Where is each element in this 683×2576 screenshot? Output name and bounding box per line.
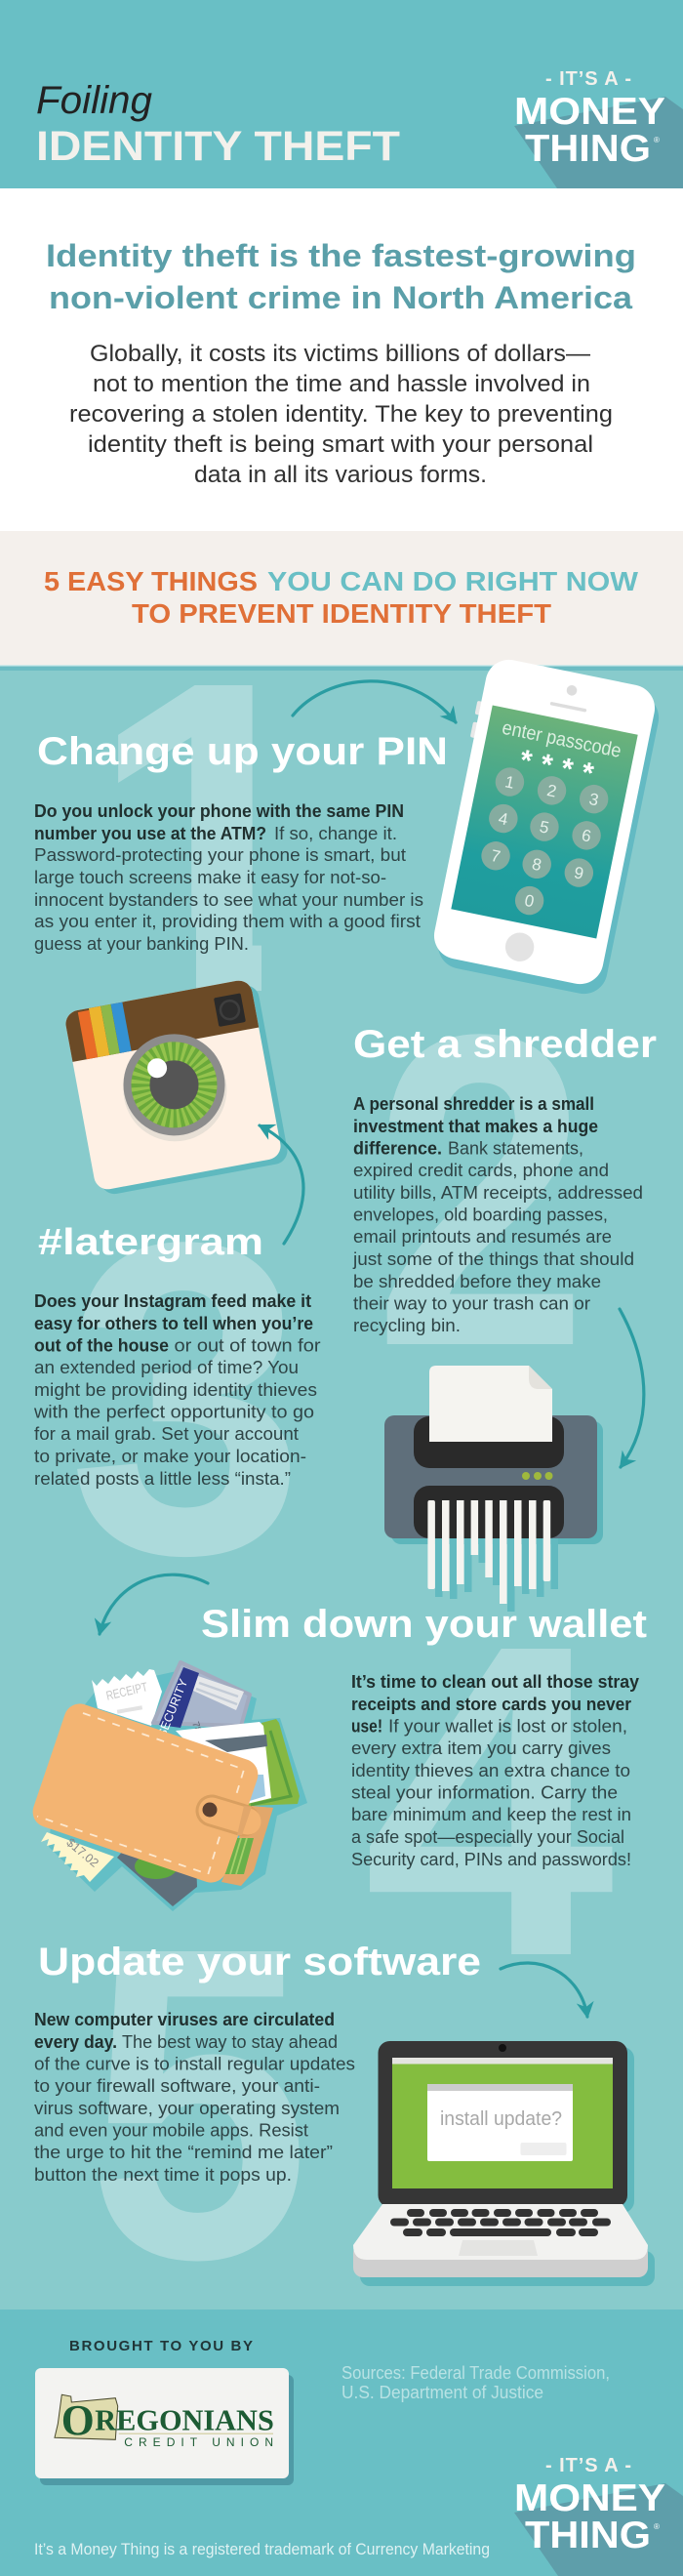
title: Foiling: Foiling [36,79,152,122]
text: step 2: A personal shredder is a small [353,1094,594,1114]
text: step 5: button the next time it pops up. [34,2165,292,2185]
text: step 1: innocent bystanders to see what your number is [34,890,423,910]
numeral 3: 3 [67,1151,305,1647]
icon: shredder [384,1366,603,1612]
sponsor card: O [61,2396,95,2444]
arrow: up to camera [260,1125,303,1244]
icon: phone: 5 [538,817,550,838]
text: step 4: use! [351,1716,382,1736]
text: step 2: difference. [353,1138,442,1158]
text: step 5: New computer viruses are circulated [34,2010,335,2029]
numeral 2: 2 [374,943,588,1439]
green bills [247,1719,300,1806]
logo: It's a Money Thing (footer): ® [654,2522,660,2531]
text: step 5: The best way to stay ahead [122,2032,338,2052]
update dialog: install update? [440,2108,562,2130]
text: step 4: If your wallet is lost or stolen, [388,1716,627,1736]
text: step 5: every day. [34,2032,117,2052]
sponsor card [35,2368,294,2485]
numeral 4: 4 [363,1553,618,2049]
text: step 4: receipts and store cards you never [351,1695,631,1714]
icon: phone: **** [517,744,596,791]
logo: It's a Money Thing (header): MONEY [514,91,665,133]
panel: 5 easy things banner: 5 EASY THINGS [44,566,258,596]
icon: phone: 2 [545,781,558,801]
text: step 3: or out of town for [174,1335,320,1355]
panel: intro [0,188,683,531]
heading: Get a shredder: Get a shredder [353,1023,657,1066]
sources: Sources: Federal Trade Commission, [342,2363,610,2383]
numeral 5: 5 [88,1856,310,2351]
text: step 2: utility bills, ATM receipts, addressed [353,1183,643,1203]
text: step 2: expired credit cards, phone and [353,1161,609,1180]
text: step 1: Do you unlock your phone with the same PIN [34,801,404,821]
text: step 3: an extended period of time? You [34,1358,299,1377]
text: step 4: every extra item you carry gives [351,1738,611,1758]
icon: laptop [353,2041,655,2286]
text: step 3: might be providing identity thieves [34,1380,317,1400]
text: step 3: for a mail grab. Set your account [34,1424,299,1444]
logo: It's a Money Thing (header): THING [525,128,651,170]
text: step 4: bare minimum and keep the rest in [351,1805,631,1824]
arrow: down to shredder [620,1309,644,1467]
icon: phone: 4 [497,809,509,829]
intro text: not to mention the time and hassle involved in [93,371,590,397]
intro text: recovering a stolen identity. The key to preventing [69,401,613,428]
text: step 3: easy for others to tell when you’re [34,1314,313,1333]
text: step 2: investment that makes a huge [353,1117,598,1136]
text: step 5: the urge to hit the “remind me later” [34,2143,333,2162]
intro heading: Identity theft is the fastest-growing [46,238,636,273]
logo: It's a Money Thing (footer): MONEY [514,2477,665,2519]
icon: wallet: $17.02 [63,1835,101,1870]
text: step 3: related posts a little less “insta.” [34,1469,291,1489]
text: step 5: virus software, your operating system [34,2099,340,2118]
text: step 5: to your firewall software, your anti- [34,2076,320,2096]
brought to you by: BROUGHT TO YOU BY [69,2338,253,2354]
intro heading [46,238,636,315]
receipt [92,1669,162,1726]
text: step 4: Security card, PINs and passwords! [351,1850,631,1869]
text: step 1 [34,801,423,954]
text: step 2: their way to your trash can or [353,1294,590,1314]
heading: Slim down your wallet: Slim down your wallet [201,1603,647,1646]
sponsor card: CREDIT UNION [124,2435,273,2449]
heading: Change up your PIN: Change up your PIN [37,730,448,773]
text: step 3: with the perfect opportunity to go [33,1402,314,1421]
icon: wallet [28,1662,307,1911]
logo: It's a Money Thing (footer): - IT’S A - [545,2455,631,2476]
main background [0,666,683,2310]
panel: 5 easy things banner [0,531,683,665]
heading: #latergram: #latergram [38,1222,263,1263]
text: step 4: It’s time to clean out all those stray [351,1672,639,1692]
icon: phone: 3 [587,790,600,809]
intro text: Globally, it costs its victims billions of dollars— [90,341,590,367]
panel: 5 easy things banner: TO PREVENT IDENTITY THEFT [132,598,551,629]
text: step 2: email printouts and resumés are [353,1227,612,1247]
panel: 5 easy things banner: YOU CAN DO RIGHT NOW [267,566,639,596]
heading: Update your software: Update your software [38,1941,481,1983]
wallet back pocket [221,1806,273,1886]
text: step 5: and even your mobile apps. Resist [34,2120,308,2140]
logo: It's a Money Thing (footer) [514,2455,683,2576]
header band [0,0,683,188]
security card: SECURITY [155,1676,191,1739]
arrow: to laptop [501,1963,587,2017]
logo: It's a Money Thing (header): ® [654,136,660,144]
text: step 4: steal your information. Carry the [351,1782,618,1802]
icon: phone: 7 [489,846,502,866]
icon: phone: 9 [573,863,585,883]
bottom card and receipt [117,1835,197,1906]
security card: 789 [189,1721,205,1739]
panel: footer [0,2310,683,2576]
text: step 3: to private, or make your location- [34,1447,306,1466]
sponsor card: REGONIANS [95,2403,274,2436]
icon: phone: enter passcode [501,717,623,762]
icon: phone [424,655,664,998]
text: step 1: as you enter it, providing them with a good first [34,912,421,931]
text: step 4: identity thieves an extra chance to [351,1761,630,1780]
update dialog [427,2084,573,2161]
intro text: data in all its various forms. [194,462,487,488]
arrow: to wallet [100,1574,208,1634]
sources: U.S. Department of Justice [342,2383,543,2402]
text: step 3: Does your Instagram feed make it [34,1291,311,1311]
text: step 1: guess at your banking PIN. [34,934,249,954]
text: step 1: number you use at the ATM? [34,824,266,843]
security card [153,1662,250,1739]
text: step 3 [33,1291,320,1489]
icon: phone: 1 [503,772,516,793]
intro text: identity theft is being smart with your personal [88,431,593,458]
text: step 2: recycling bin. [353,1316,461,1335]
text: step 5: of the curve is to install regular updates [34,2054,355,2073]
text: step 2: be shredded before they make [353,1272,601,1291]
intro heading: non-violent crime in North America [49,280,632,315]
logo: It's a Money Thing (footer): THING [525,2515,651,2556]
text: step 1: If so, change it. [274,824,397,843]
credit card [176,1722,271,1804]
sources [342,2363,610,2402]
text: step 2: just some of the things that should [352,1249,634,1269]
text: step 3: out of the house [34,1335,169,1355]
icon: instagram camera [63,977,290,1198]
icon: phone: 6 [580,826,593,846]
logo: It's a Money Thing (header) [514,68,683,188]
wallet clasp [203,1802,273,1835]
arrow: to phone [293,681,456,722]
trademark note: It’s a Money Thing is a registered trademark of Currency Marketing [34,2540,490,2558]
text: step 4 [351,1672,639,1869]
numeral 1: 1 [88,590,335,1085]
intro text [69,341,613,488]
icon: phone: 0 [523,891,536,911]
wallet body [28,1699,262,1887]
receipt: RECEIPT [104,1679,149,1703]
title: Identity Theft: IDENTITY THEFT [36,123,400,170]
logo: It's a Money Thing (header): - IT’S A - [545,68,631,90]
text: step 1: large touch screens make it easy for not-so- [34,868,386,887]
text: step 2: envelopes, old boarding passes, [353,1205,608,1224]
text: step 5 [34,2010,355,2185]
text: step 2 [352,1094,643,1335]
icon: phone: 8 [531,855,543,875]
text: step 4: a safe spot—especially your Social [351,1827,624,1847]
text: step 1: Password-protecting your phone is smart, but [34,845,406,865]
text: step 2: Bank statements, [448,1138,583,1158]
